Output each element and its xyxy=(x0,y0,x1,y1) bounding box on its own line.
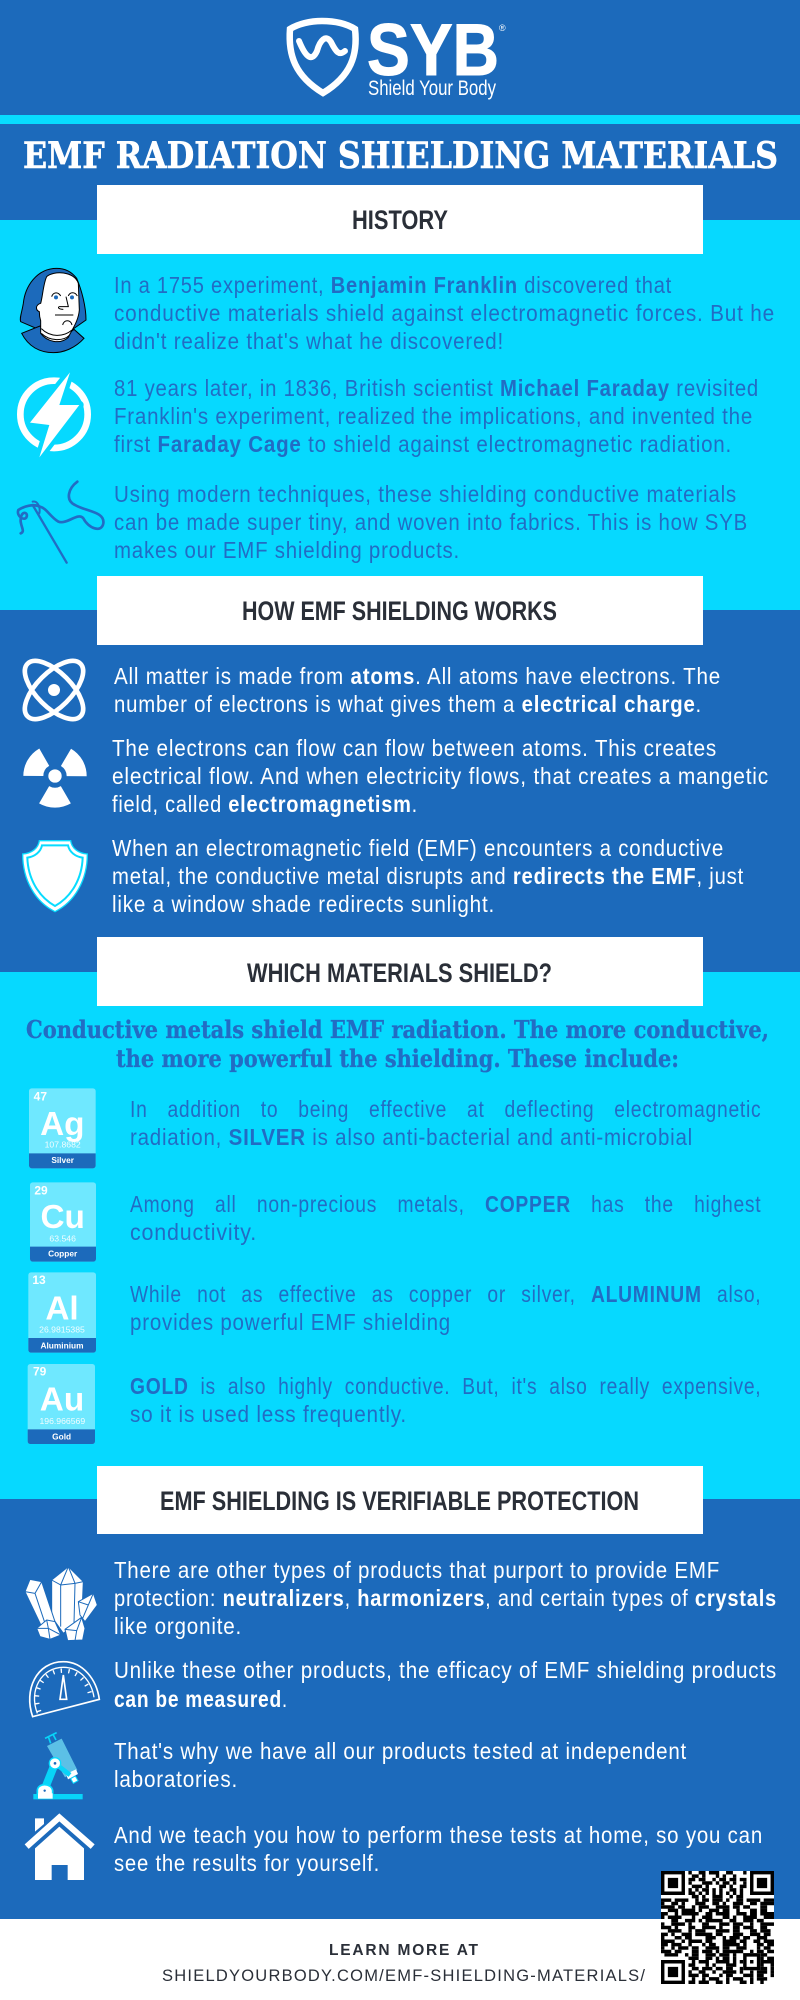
text: silver: radiation, SILVER is also anti-bacterial and anti-microbial xyxy=(130,1124,693,1150)
logo: SYB Shield Your Body: Shield Your Body xyxy=(368,77,496,100)
icon: copper element tile: Cu xyxy=(40,1199,85,1236)
text: history paragraph 3 xyxy=(114,481,748,563)
text: verifiable paragraph 3: That's why we have all our products tested at independent xyxy=(114,1738,687,1764)
text: verifiable paragraph 1: like orgonite. xyxy=(114,1613,242,1639)
text: history paragraph 1: didn't realize that's what he discovered! xyxy=(114,328,504,354)
icon: silver element tile: Silver xyxy=(51,1155,75,1165)
text: how it works paragraph 1: All matter is made from atoms. All atoms have electrons. The xyxy=(114,663,721,689)
heading: which materials shield: WHICH MATERIALS SHIELD? xyxy=(247,958,552,988)
text: gold: so it is used less frequently. xyxy=(130,1401,407,1427)
icon: aluminium element tile: 13 xyxy=(32,1273,46,1287)
text: how it works paragraph 1 xyxy=(114,663,721,717)
text: verifiable paragraph 4: see the results for yourself. xyxy=(114,1850,380,1876)
text: how it works paragraph 2: field, called electromagnetism. xyxy=(112,791,418,817)
text: history paragraph 2: first Faraday Cage to shield against electromagnetic radiation. xyxy=(114,431,732,457)
text: silver xyxy=(130,1095,761,1150)
icon: aluminium element tile: Al xyxy=(45,1290,79,1327)
icon: aluminium element tile xyxy=(28,1272,96,1353)
icon: silver element tile: Ag xyxy=(40,1106,85,1143)
icon: gold element tile: Gold xyxy=(52,1432,71,1442)
icon: gold element tile: 196.966569 xyxy=(39,1416,85,1426)
text: copper: Among all non-precious metals, COPPER has the highest xyxy=(130,1191,761,1217)
heading: which materials shield xyxy=(97,937,703,1006)
icon: gauge xyxy=(30,1662,99,1717)
icon: shield xyxy=(23,841,87,912)
icon: aluminium element tile: Aluminium xyxy=(40,1341,84,1351)
text: verifiable paragraph 1: There are other types of products that purport to provide EMF xyxy=(114,1557,720,1583)
subheading: conductive metals xyxy=(26,1015,769,1073)
text: gold xyxy=(130,1372,761,1427)
icon: gold element tile: 79 xyxy=(33,1365,47,1379)
text: history paragraph 2 xyxy=(114,375,759,457)
text: how it works paragraph 3: like a window shade redirects sunlight. xyxy=(112,891,495,917)
text: how it works paragraph 1: number of electrons is what gives them a electrical charge. xyxy=(114,691,702,717)
text: history paragraph 1 xyxy=(114,272,775,354)
text: silver: In addition to being effective at deflecting electromagnetic xyxy=(130,1096,761,1122)
text: copper: conductivity. xyxy=(130,1219,257,1245)
footer call to action xyxy=(162,1942,645,1985)
text: history paragraph 1: In a 1755 experiment, Benjamin Franklin discovered that xyxy=(114,272,672,298)
icon: copper element tile: 63.546 xyxy=(49,1233,76,1243)
footer call to action: LEARN MORE AT xyxy=(329,1942,479,1959)
icon: copper element tile xyxy=(30,1182,96,1262)
icon: aluminium element tile: 26.9815385 xyxy=(39,1324,85,1334)
subheading: conductive metals: the more powerful the shielding. These include: xyxy=(116,1044,679,1073)
heading: how EMF shielding works: HOW EMF SHIELDING WORKS xyxy=(242,596,557,626)
text: gold: GOLD is also highly conductive. But, it's also really expensive, xyxy=(130,1373,761,1399)
icon: silver element tile: 47 xyxy=(34,1090,47,1104)
text: how it works paragraph 3: metal, the conductive metal disrupts and redirects the EMF, just xyxy=(112,863,744,889)
icon: radiation xyxy=(25,746,85,806)
text: copper xyxy=(130,1190,761,1245)
QR code xyxy=(661,1871,774,1984)
heading: history xyxy=(97,185,703,254)
text: verifiable paragraph 4 xyxy=(114,1822,763,1876)
text: verifiable paragraph 1 xyxy=(114,1557,777,1639)
icon: atom xyxy=(15,651,93,729)
icon: house xyxy=(27,1817,93,1880)
text: aluminum: provides powerful EMF shielding xyxy=(130,1309,451,1335)
text: how it works paragraph 2 xyxy=(112,735,769,817)
footer call to action: SHIELDYOURBODY.COM/EMF-SHIELDING-MATERIALS/ xyxy=(162,1967,645,1985)
icon: copper element tile: Copper xyxy=(48,1249,78,1259)
icon: lightning xyxy=(20,372,88,457)
heading: verifiable protection: EMF SHIELDING IS VERIFIABLE PROTECTION xyxy=(160,1486,639,1516)
logo: SYB Shield Your Body: ® xyxy=(499,23,506,33)
text: how it works paragraph 3: When an electromagnetic field (EMF) encounters a conductive xyxy=(112,835,724,861)
text: history paragraph 2: 81 years later, in 1836, British scientist Michael Faraday revisited xyxy=(114,375,759,401)
text: how it works paragraph 2: The electrons can flow can flow between atoms. This creates xyxy=(112,735,717,761)
icon: copper element tile: 29 xyxy=(34,1183,48,1197)
text: aluminum: While not as effective as copper or silver, ALUMINUM also, xyxy=(130,1281,761,1307)
icon: gold element tile xyxy=(28,1364,95,1444)
icon: crystals xyxy=(25,1567,97,1641)
text: verifiable paragraph 3: laboratories. xyxy=(114,1766,238,1792)
text: verifiable paragraph 1: protection: neutralizers, harmonizers, and certain types of crystals xyxy=(114,1585,777,1611)
text: verifiable paragraph 2: can be measured. xyxy=(114,1686,288,1712)
icon: silver element tile xyxy=(29,1088,96,1168)
text: history paragraph 3: makes our EMF shielding products. xyxy=(114,537,460,563)
heading: verifiable protection xyxy=(97,1466,703,1534)
icon: gold element tile: Au xyxy=(40,1381,84,1418)
heading: how EMF shielding works xyxy=(97,576,703,645)
icon: Benjamin Franklin xyxy=(20,268,86,353)
icon: microscope xyxy=(33,1733,83,1799)
logo: SYB Shield Your Body xyxy=(290,10,506,100)
logo: SYB Shield Your Body: SYB xyxy=(367,10,499,91)
text: how it works paragraph 3 xyxy=(112,835,744,917)
text: verifiable paragraph 3 xyxy=(114,1738,687,1792)
heading: history: HISTORY xyxy=(352,205,448,235)
text: verifiable paragraph 2 xyxy=(114,1657,777,1712)
icon: silver element tile: 107.8682 xyxy=(45,1140,81,1150)
icon: needle and thread xyxy=(18,482,103,563)
text: aluminum xyxy=(130,1280,761,1335)
